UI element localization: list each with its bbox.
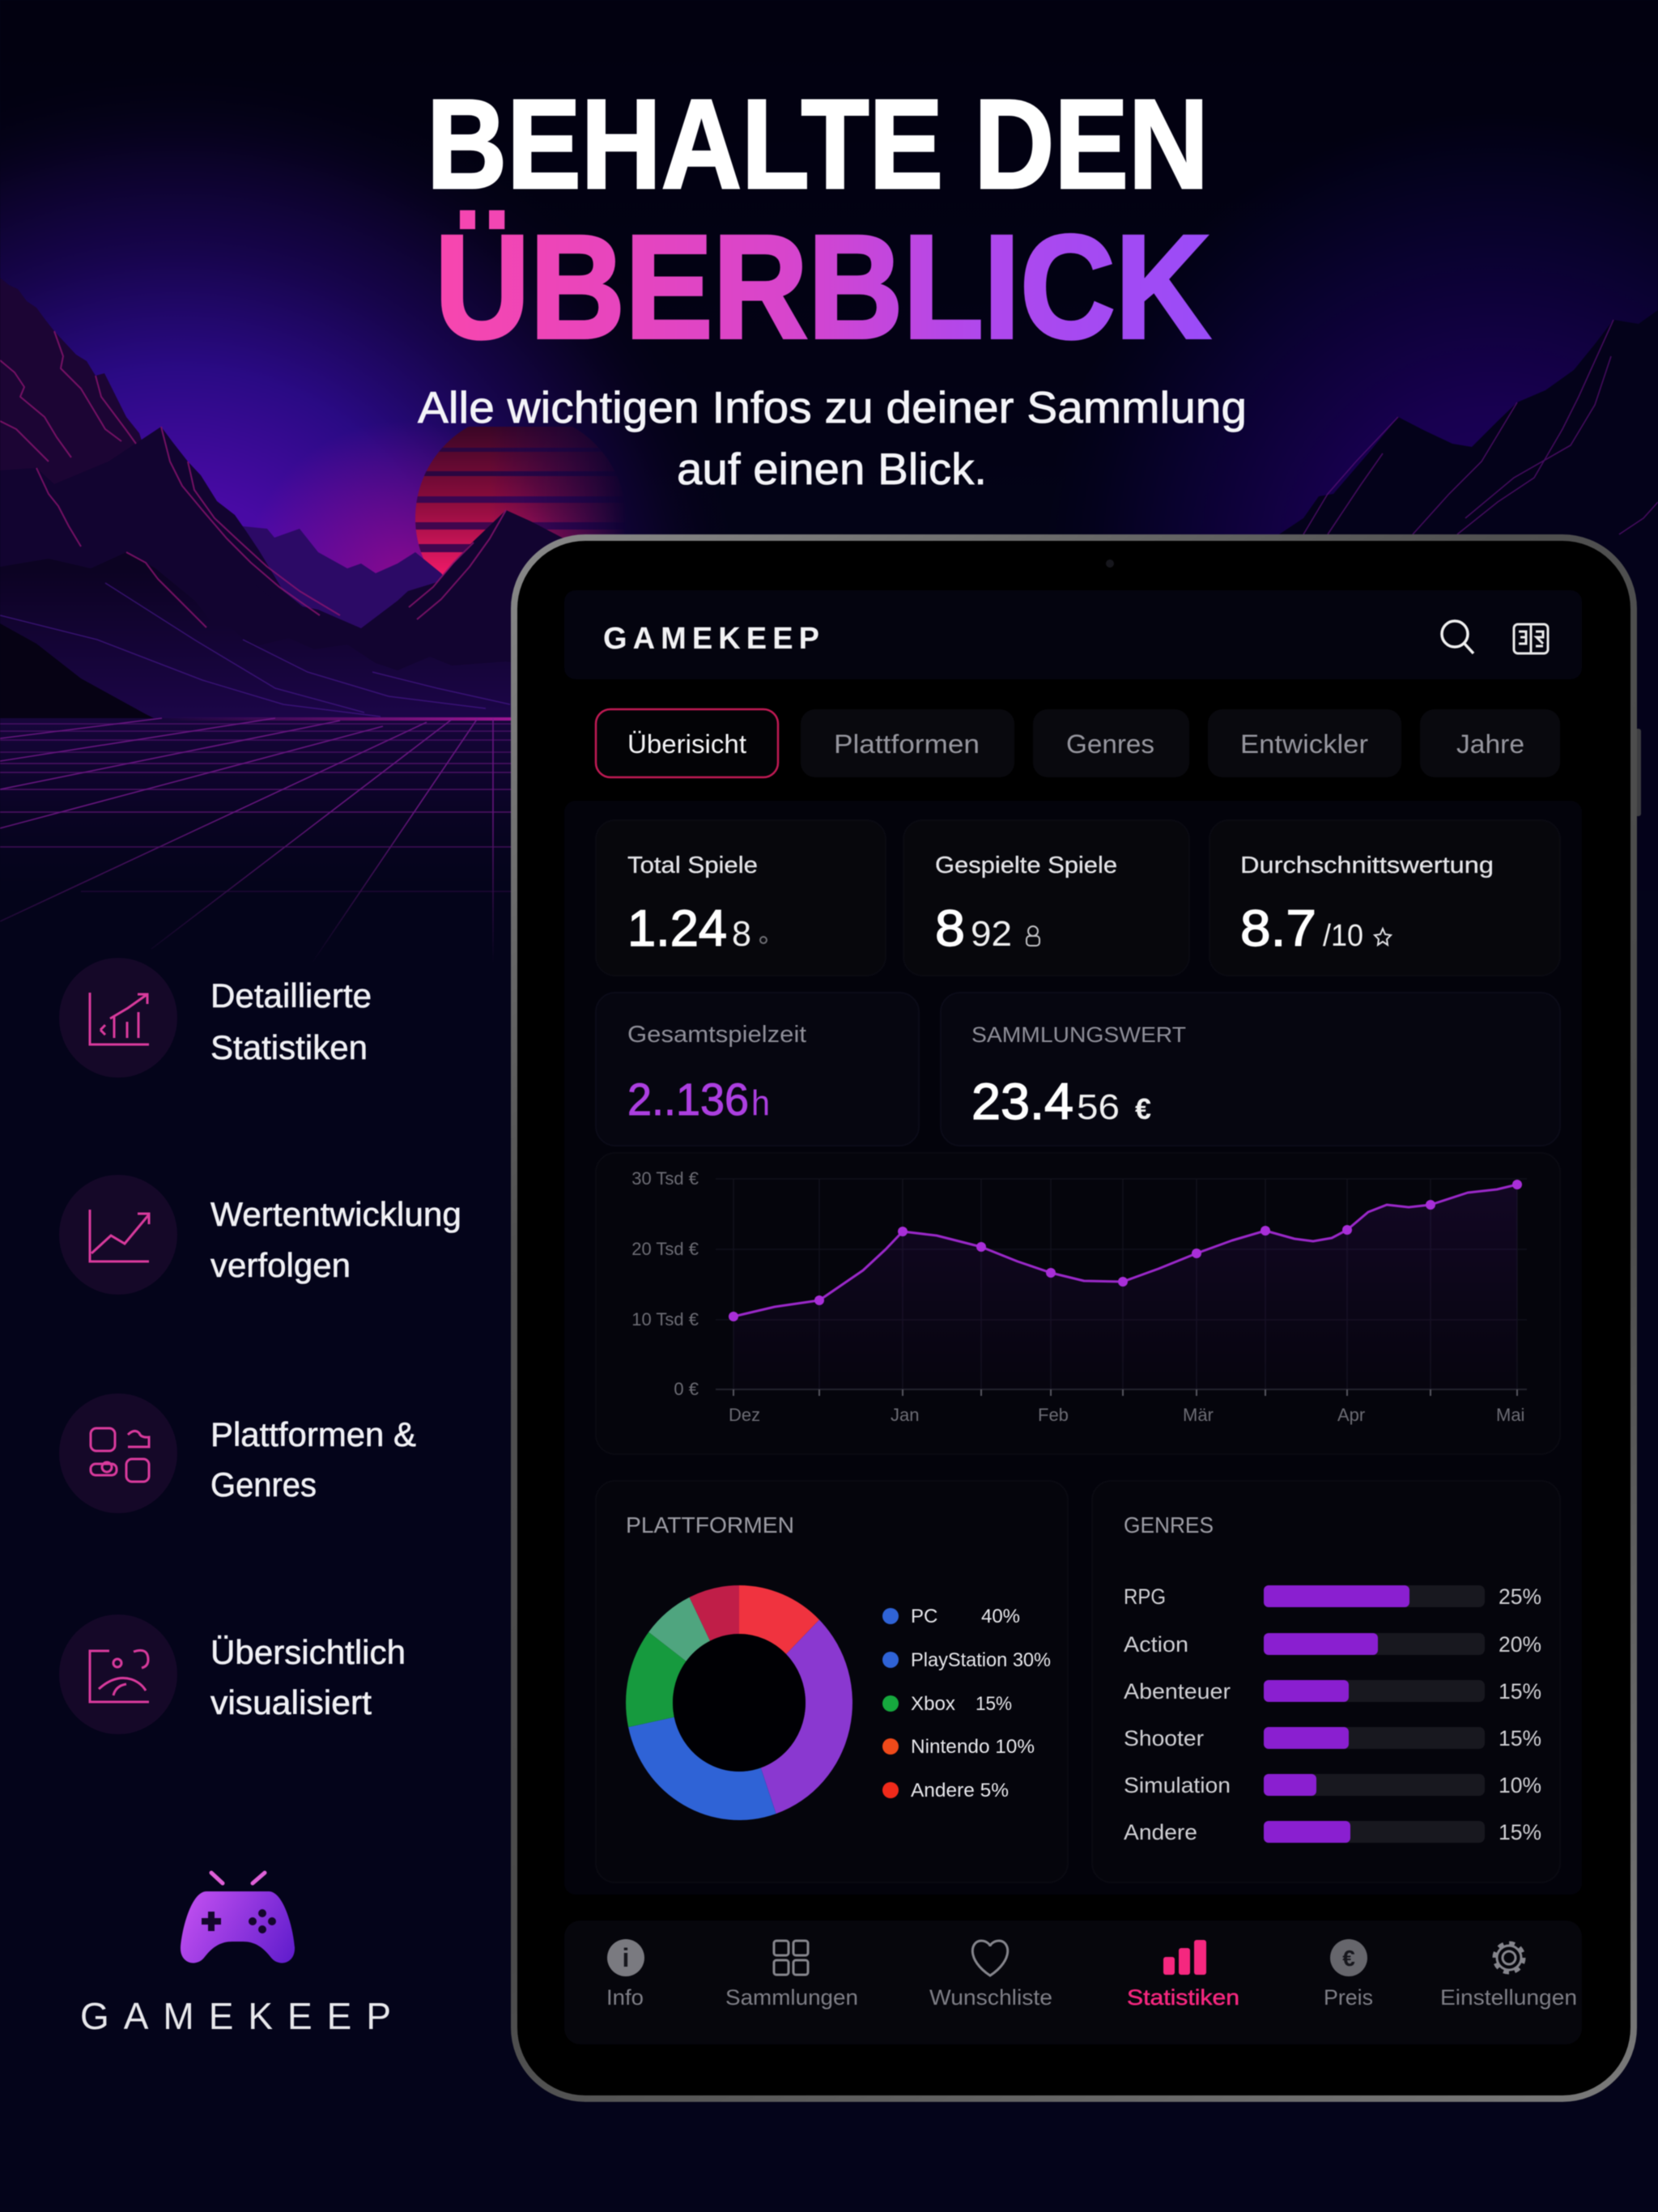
bar: Action: 20% [1499, 1632, 1541, 1657]
tab: Plattformen: Plattformen [834, 730, 980, 759]
bar: Action: Action [1124, 1632, 1188, 1657]
legend [882, 1606, 1051, 1802]
nav: Sammlungen: Sammlungen [725, 1985, 858, 2010]
feature: Wertentwicklung verfolgen: verfolgen [210, 1246, 351, 1284]
header bar [564, 590, 1582, 679]
panel: Plattformen [596, 1481, 1068, 1882]
tab: Übersicht: Überisicht [627, 730, 746, 759]
stat: Sammlungswert [941, 993, 1560, 1146]
stat: Gespielte Spiele: 8 [935, 900, 965, 957]
data points [729, 1180, 1522, 1321]
stat: Sammlungswert: 23.4 [971, 1074, 1073, 1130]
x axis labels: Dez [729, 1405, 760, 1425]
bar: Simulation: 10% [1499, 1773, 1541, 1797]
legend: Andere 5% [911, 1780, 1009, 1802]
bar: Abenteuer [1124, 1679, 1541, 1704]
tab: Plattformen [801, 709, 1014, 777]
left mountains [0, 278, 631, 718]
bar: Shooter: Shooter [1124, 1726, 1204, 1750]
subtitle: auf einen Blick. [677, 444, 987, 494]
feature: Plattformen und Genres: Plattformen & [210, 1415, 416, 1453]
feature: Übersichtlich visualisiert: visualisiert [210, 1683, 372, 1721]
value area [733, 1185, 1517, 1389]
stat: Gesamtspielzeit: Gesamtspielzeit [627, 1022, 806, 1048]
nav: Statistiken [1127, 1940, 1239, 2010]
subtitle: Alle wichtigen Infos zu deiner Sammlung [418, 382, 1247, 432]
stat: Gespielte Spiele [903, 820, 1189, 976]
x axis labels: Feb [1038, 1405, 1069, 1425]
bar: Abenteuer: Abenteuer [1124, 1679, 1231, 1704]
panel: Plattformen: PLATTFORMEN [626, 1512, 794, 1538]
tabs [596, 709, 1560, 777]
legend: Xbox [911, 1693, 955, 1715]
bar: RPG: 25% [1499, 1585, 1541, 1609]
icon: collection [1514, 624, 1548, 653]
feature list [59, 958, 461, 1734]
y axis labels: 0 € [674, 1379, 699, 1399]
feature: Plattformen und Genres [59, 1393, 416, 1513]
y axis labels [631, 1168, 699, 1399]
bar: Shooter [1124, 1726, 1541, 1750]
feature: Detaillierte Statistiken: Detaillierte [210, 976, 372, 1015]
bar: Andere [1124, 1820, 1541, 1844]
x axis labels [729, 1405, 1524, 1425]
feature: Übersichtlich visualisiert: Übersichtlich [210, 1633, 406, 1671]
stat: Gesamtspielzeit: h [751, 1083, 770, 1123]
nav: Wunschliste: Wunschliste [929, 1985, 1052, 2010]
stat: Total Spiele [596, 820, 886, 976]
bar: Abenteuer: 15% [1499, 1679, 1541, 1704]
feature: Übersichtlich visualisiert [59, 1614, 406, 1734]
nav: Sammlungen [725, 1941, 858, 2010]
nav: Preis [1324, 1939, 1373, 2010]
right mountains [1263, 310, 1658, 891]
nav: Preis: € [1342, 1946, 1355, 1971]
bar: Simulation [1124, 1773, 1541, 1797]
stat: Sammlungswert: SAMMLUNGSWERT [971, 1023, 1186, 1047]
stat: Total Spiele: 8 [732, 914, 751, 954]
nav: Info: Info [606, 1985, 644, 2010]
nav: Wunschliste [929, 1941, 1052, 2010]
tab: Entwickler: Entwickler [1240, 730, 1368, 759]
nav: Einstellungen [1440, 1943, 1577, 2010]
logo wordmark: GAMEKEEP [80, 1995, 391, 2037]
panel: Genres [1092, 1481, 1560, 1882]
tab: Jahre: Jahre [1456, 730, 1524, 759]
feature: Plattformen und Genres: Genres [210, 1465, 317, 1504]
content panel [564, 801, 1582, 1895]
feature: Detaillierte Statistiken: Statistiken [210, 1028, 368, 1066]
tablet frame [514, 538, 1641, 2099]
icon: search [1442, 621, 1473, 653]
donut chart [626, 1585, 852, 1820]
tab: Genres [1033, 709, 1189, 777]
stat: Durchschnittswertung [1209, 820, 1560, 976]
bar: Action [1124, 1632, 1541, 1657]
tab: Jahre [1420, 709, 1560, 777]
legend: Nintendo 10% [911, 1736, 1035, 1758]
bar: Simulation: Simulation [1124, 1773, 1231, 1797]
y axis labels: 10 Tsd € [631, 1309, 699, 1329]
feature: Wertentwicklung verfolgen [59, 1175, 461, 1295]
stat: Durchschnittswertung: /10 [1323, 919, 1363, 953]
stat: Durchschnittswertung: 8.7 [1240, 900, 1316, 957]
feature: Wertentwicklung verfolgen: Wertentwicklung [210, 1195, 461, 1233]
x axis labels: Apr [1337, 1405, 1365, 1425]
tab: Entwickler [1208, 709, 1401, 777]
title line 2: ÜBERBLICK [435, 204, 1210, 369]
legend: 40% [981, 1606, 1020, 1627]
x axis labels: Mär [1183, 1405, 1214, 1425]
app name: GAMEKEEP [603, 622, 819, 656]
bar: Andere: 15% [1499, 1820, 1541, 1844]
nav: Preis: Preis [1324, 1985, 1373, 2010]
nav: Statistiken: Statistiken [1127, 1985, 1239, 2010]
stat: Durchschnittswertung: Durchschnittswertung [1240, 853, 1494, 878]
nav: Info: i [623, 1943, 629, 1972]
legend: PlayStation 30% [911, 1649, 1051, 1671]
bottom navigation [564, 1921, 1582, 2044]
nav: Einstellungen: Einstellungen [1440, 1985, 1577, 2010]
stat: Total Spiele: 1.24 [627, 900, 727, 957]
x axis labels: Jan [891, 1405, 919, 1425]
title line 1: BEHALTE DEN [427, 74, 1209, 215]
bar: RPG [1124, 1585, 1541, 1609]
tab: Übersicht [596, 709, 778, 777]
bar: Shooter: 15% [1499, 1726, 1541, 1750]
tab: Genres: Genres [1066, 730, 1154, 759]
nav: Info [606, 1939, 644, 2010]
value line [733, 1185, 1517, 1317]
stat: Gesamtspielzeit [596, 993, 919, 1146]
perspective grid [0, 717, 518, 1058]
panel: Genres: GENRES [1124, 1512, 1214, 1538]
subtitle [418, 382, 1247, 494]
bar: Andere: Andere [1124, 1820, 1197, 1844]
retro sun [414, 426, 620, 575]
y axis labels: 20 Tsd € [631, 1239, 699, 1259]
stat: Gespielte Spiele: 92 [971, 914, 1012, 954]
stat: Sammlungswert: € [1135, 1092, 1151, 1125]
icon: game controller [181, 1873, 295, 1963]
y axis labels: 30 Tsd € [631, 1168, 699, 1189]
feature: Detaillierte Statistiken [59, 958, 372, 1078]
tablet [514, 538, 1641, 2099]
stat: Total Spiele: Total Spiele [627, 853, 758, 878]
logo [80, 1873, 391, 2037]
stat: Gespielte Spiele: Gespielte Spiele [935, 853, 1117, 878]
stat: Sammlungswert: 56 [1077, 1087, 1120, 1127]
title [427, 74, 1210, 369]
bar: RPG: RPG [1124, 1585, 1166, 1609]
x axis labels: Mai [1496, 1405, 1524, 1425]
line chart [596, 1153, 1560, 1454]
legend: PC [911, 1606, 937, 1627]
stat: Gesamtspielzeit: 2..136 [627, 1074, 749, 1125]
legend: 15% [976, 1693, 1012, 1715]
